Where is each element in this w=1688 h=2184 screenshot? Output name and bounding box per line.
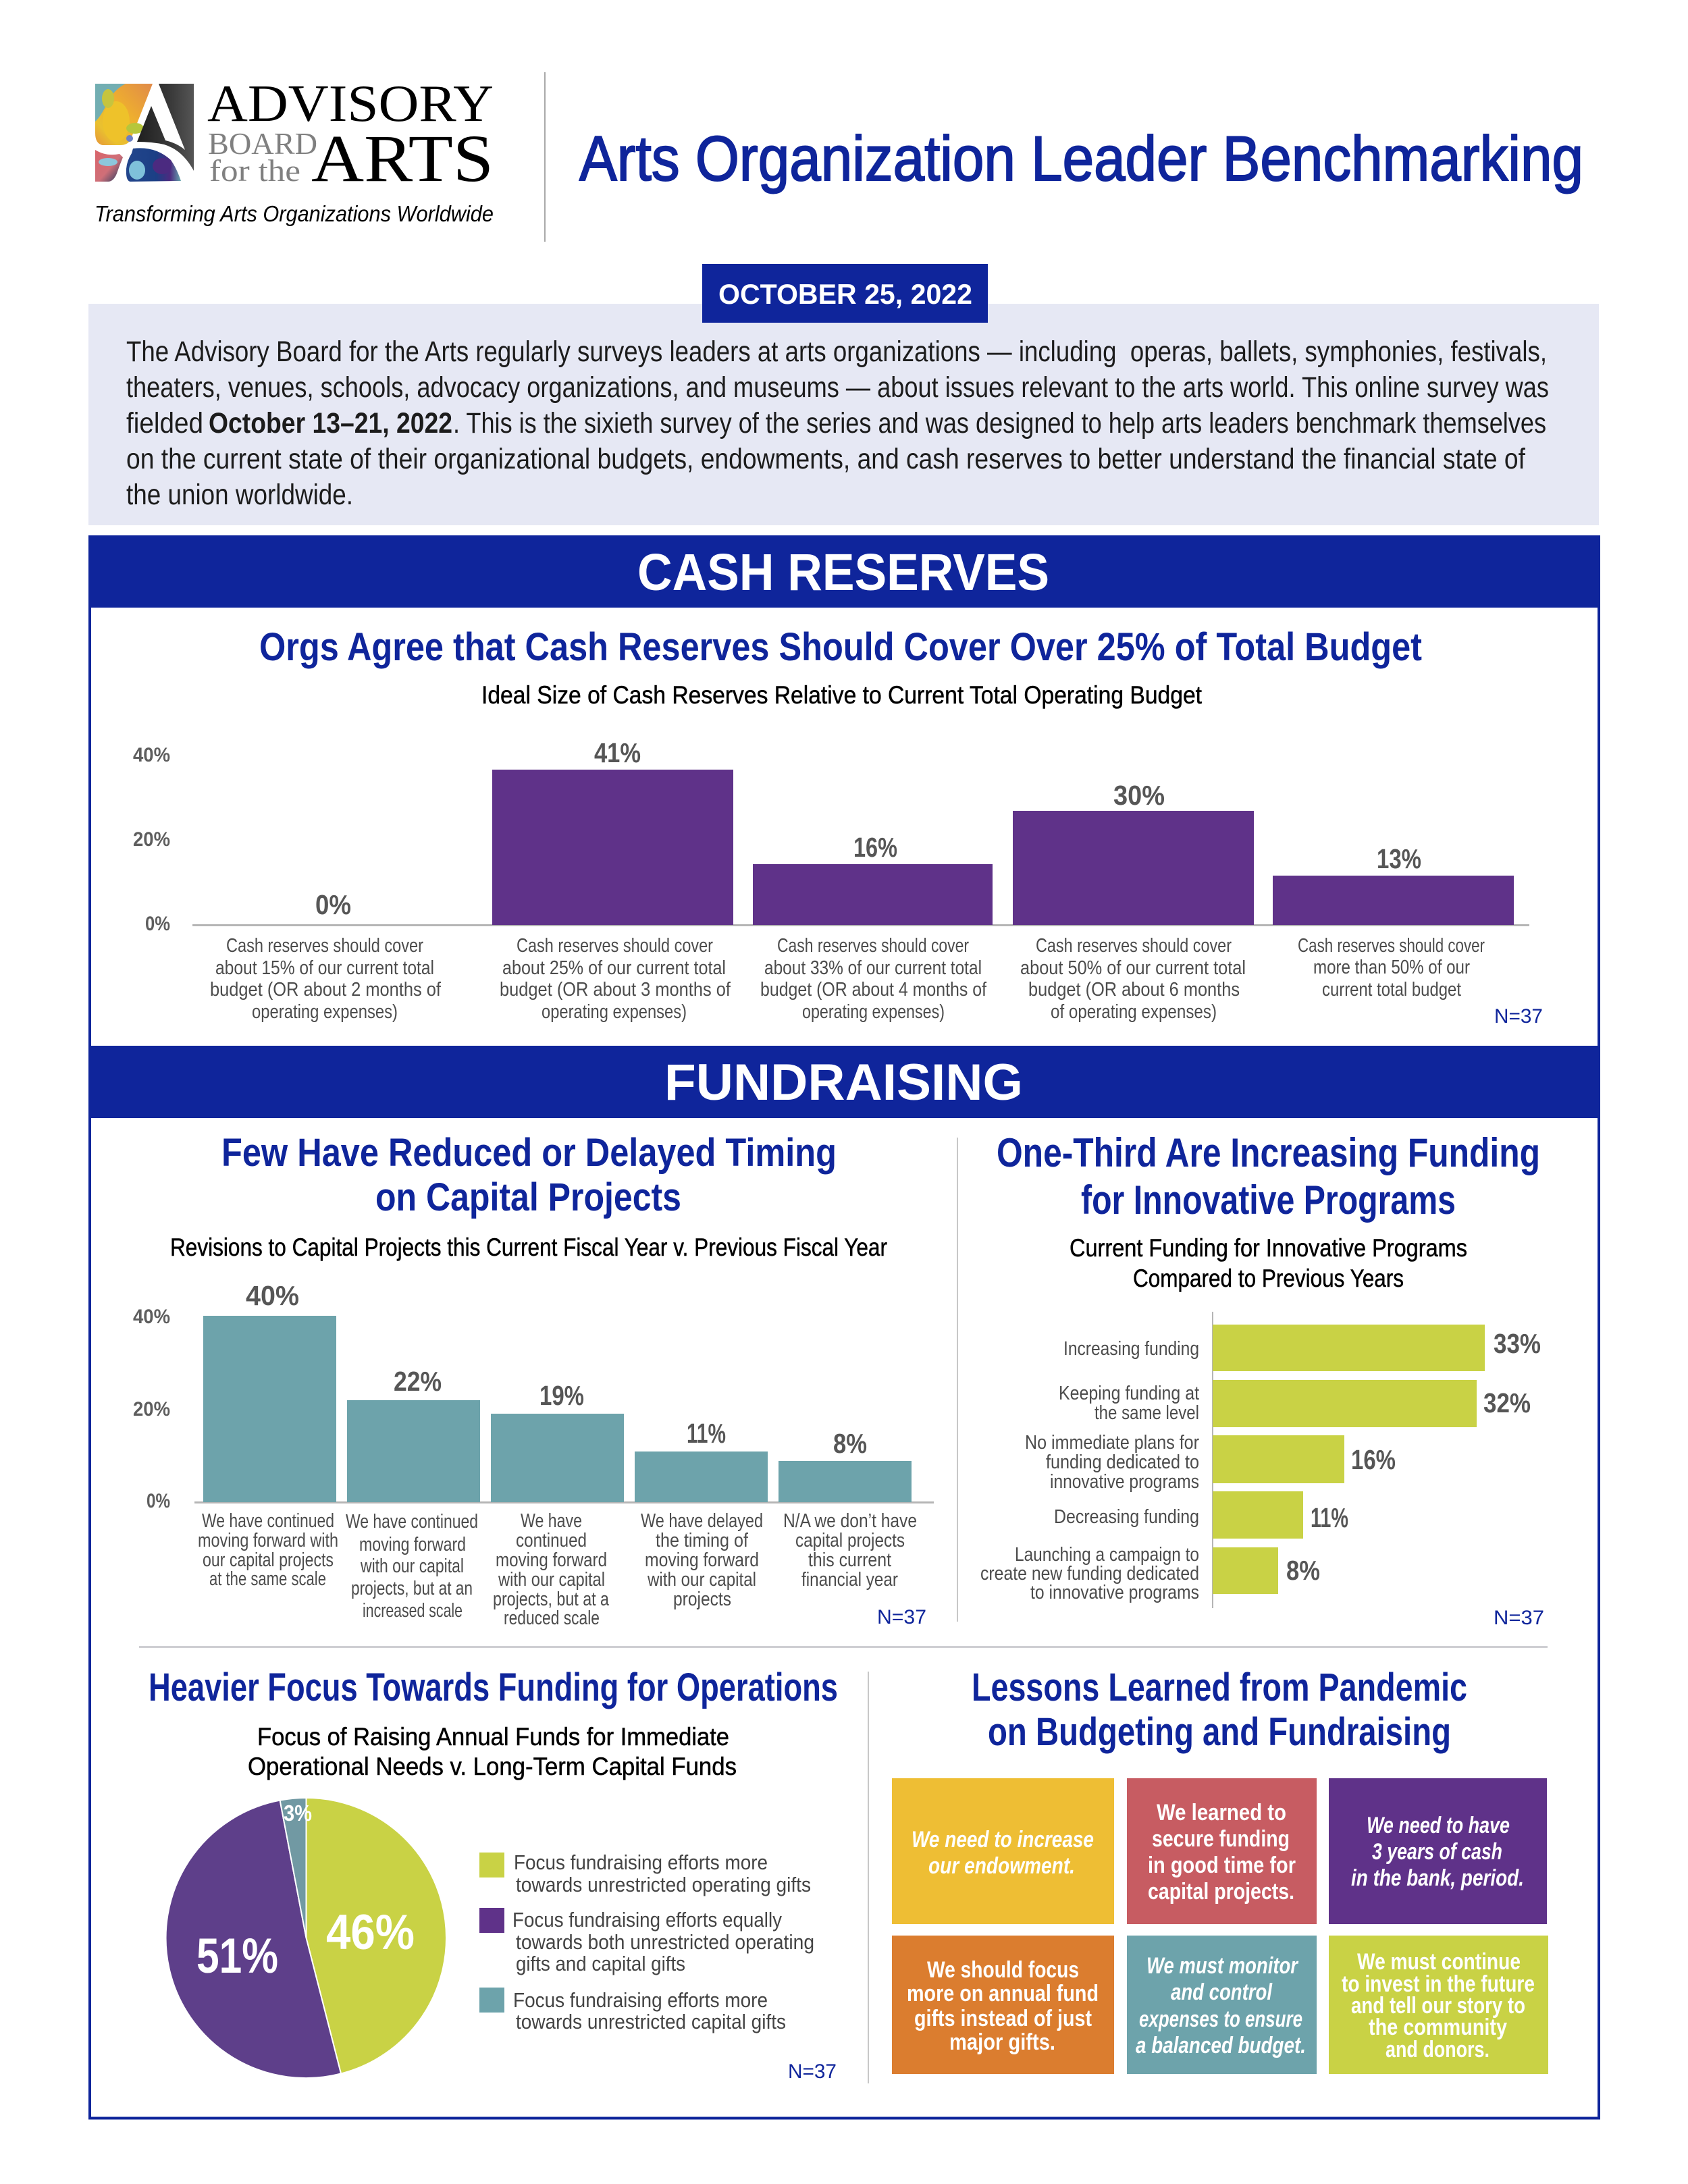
bar values bbox=[1286, 1328, 1541, 1586]
bar values: 22% bbox=[394, 1366, 442, 1397]
lesson card: annual fund gifts: more on annual fund bbox=[907, 1981, 1099, 2006]
section banner: fundraising: FUNDRAISING bbox=[664, 1054, 1023, 1111]
horizontal bar chart: funding for innovative programs bbox=[980, 1312, 1544, 1629]
heading: on Budgeting and Fundraising bbox=[988, 1710, 1451, 1754]
lesson card: endowment: our endowment. bbox=[928, 1853, 1075, 1879]
category label: 50% bbox=[1020, 935, 1246, 1023]
lesson card: invest in the future bbox=[1329, 1936, 1548, 2074]
lesson card: invest in the future: We must continue bbox=[1357, 1949, 1521, 1975]
category label: 33%: operating expenses) bbox=[802, 1001, 945, 1023]
bar values: 32% bbox=[1483, 1387, 1531, 1418]
logo wordmark: BOARD bbox=[208, 127, 317, 161]
logo wordmark: for the bbox=[209, 153, 300, 188]
section banner: cash reserves: CASH RESERVES bbox=[637, 543, 1049, 602]
bar labels: Keeping funding at bbox=[1059, 1383, 1199, 1404]
category label: 15%: operating expenses) bbox=[252, 1001, 398, 1023]
category label: 33%: about 33% of our current total bbox=[764, 957, 982, 979]
bar values: 13% bbox=[1377, 843, 1421, 874]
sample size note: N=37 bbox=[877, 1606, 926, 1628]
lesson card: cash in the bank: in the bank, period. bbox=[1351, 1865, 1524, 1891]
logo wordmark bbox=[207, 74, 494, 196]
category label: delayed timing: We have delayed bbox=[641, 1510, 763, 1532]
bar values: 11% bbox=[687, 1418, 726, 1449]
panel: capital projects bbox=[133, 1131, 934, 1629]
bar values: 16% bbox=[1351, 1444, 1396, 1475]
category label: increased scale: We have continued bbox=[346, 1511, 478, 1533]
category label: 25% bbox=[500, 935, 731, 1023]
lesson card: capital funding: capital projects. bbox=[1148, 1879, 1294, 1905]
bar values: 33% bbox=[1494, 1328, 1541, 1359]
chart subtitle: Current Funding for Innovative Programs bbox=[1070, 1234, 1467, 1262]
chart heading bbox=[997, 1130, 1540, 1223]
category label: more than 50%: current total budget bbox=[1322, 979, 1461, 1001]
bars bbox=[203, 1316, 912, 1502]
pie chart bbox=[166, 1798, 446, 2078]
date badge: OCTOBER 25, 2022 bbox=[718, 278, 972, 310]
legend: towards unrestricted capital gifts bbox=[516, 2010, 786, 2033]
logo tagline: Transforming Arts Organizations Worldwide bbox=[95, 201, 494, 226]
legend: towards both unrestricted operating bbox=[516, 1930, 814, 1954]
chart subtitle: Revisions to Capital Projects this Current Fiscal Year v. Previous Fiscal Year bbox=[170, 1233, 887, 1261]
bar values bbox=[246, 1280, 867, 1459]
lesson card: capital funding: secure funding bbox=[1152, 1826, 1290, 1852]
y axis labels: 40% bbox=[133, 1306, 170, 1328]
chart heading: for Innovative Programs bbox=[1081, 1177, 1456, 1223]
lesson card: annual fund gifts: We should focus bbox=[927, 1957, 1079, 1983]
category label: increased scale bbox=[346, 1511, 478, 1622]
category label: reduced scale: with our capital bbox=[498, 1569, 605, 1591]
bar labels: create new funding dedicated bbox=[980, 1563, 1199, 1584]
intro paragraph: fielded bbox=[126, 407, 203, 440]
bar values: 8% bbox=[833, 1428, 867, 1459]
y axis labels: 20% bbox=[133, 1398, 170, 1420]
y axis labels bbox=[133, 744, 170, 935]
y axis labels bbox=[133, 1306, 170, 1512]
category label: 25%: operating expenses) bbox=[542, 1001, 687, 1023]
lesson card: cash in the bank bbox=[1329, 1778, 1547, 1924]
bar labels: No immediate plans for bbox=[1025, 1432, 1199, 1454]
chart subtitle bbox=[248, 1723, 737, 1780]
y axis labels: 0% bbox=[145, 913, 170, 935]
panel: lessons learned bbox=[892, 1666, 1548, 2074]
legend: gifts and capital gifts bbox=[516, 1952, 685, 1975]
legend: towards unrestricted operating gifts bbox=[516, 1873, 811, 1896]
bar values bbox=[315, 737, 1421, 920]
category label: increased scale: with our capital bbox=[360, 1555, 464, 1577]
lesson card: cash in the bank: We need to have bbox=[1367, 1813, 1510, 1838]
panel: cash reserves bbox=[88, 535, 1600, 1028]
category label: not applicable: financial year bbox=[801, 1569, 898, 1591]
chart heading: Few Have Reduced or Delayed Timing bbox=[221, 1131, 837, 1175]
lesson card: control expenses: a balanced budget. bbox=[1136, 2033, 1306, 2058]
chart heading bbox=[221, 1131, 837, 1219]
category label: same scale: at the same scale bbox=[209, 1568, 326, 1590]
bar values: 0% bbox=[315, 889, 351, 920]
legend: Focus fundraising efforts more bbox=[513, 1988, 768, 2012]
category label: 25%: Cash reserves should cover bbox=[517, 935, 713, 957]
bar labels: Launching a campaign to bbox=[1015, 1544, 1199, 1566]
bar labels: Increasing funding bbox=[1063, 1338, 1199, 1360]
lesson card: control expenses bbox=[1127, 1936, 1317, 2074]
lesson card: invest in the future: and donors. bbox=[1386, 2037, 1489, 2062]
lesson card: capital funding bbox=[1127, 1778, 1317, 1924]
icon: painted A mark bbox=[95, 84, 194, 182]
category label: delayed timing: moving forward bbox=[645, 1549, 759, 1571]
category label: 15%: Cash reserves should cover bbox=[226, 935, 423, 957]
legend: Focus fundraising efforts more bbox=[514, 1850, 768, 1874]
category label: delayed timing bbox=[641, 1510, 763, 1610]
bar labels: funding dedicated to bbox=[1046, 1451, 1199, 1473]
category label: not applicable: this current bbox=[808, 1549, 891, 1571]
bars bbox=[492, 770, 1514, 925]
bar chart: revisions to capital projects bbox=[133, 1280, 934, 1629]
intro paragraph: October 13–21, 2022 bbox=[209, 407, 452, 440]
sample size note: N=37 bbox=[788, 2060, 837, 2083]
bar values: 16% bbox=[853, 832, 897, 863]
chart heading: Heavier Focus Towards Funding for Operations bbox=[149, 1666, 838, 1709]
category label: reduced scale: We have bbox=[521, 1510, 582, 1532]
category label: 25%: budget (OR about 3 months of bbox=[500, 979, 731, 1001]
date badge bbox=[702, 264, 988, 323]
chart subtitle: Compared to Previous Years bbox=[1133, 1264, 1404, 1292]
panel: intro text band bbox=[88, 304, 1599, 525]
category label: 15%: budget (OR about 2 months of bbox=[210, 979, 442, 1001]
logo wordmark: ARTS bbox=[311, 121, 494, 196]
lesson card: control expenses: and control bbox=[1171, 1979, 1273, 2005]
y axis labels: 40% bbox=[133, 744, 170, 766]
pie chart: 3% bbox=[284, 1801, 312, 1826]
bar labels: Decreasing funding bbox=[1054, 1506, 1199, 1528]
category label: 50%: of operating expenses) bbox=[1051, 1001, 1217, 1023]
panel: innovative programs bbox=[980, 1130, 1544, 1629]
chart subtitle: Ideal Size of Cash Reserves Relative to Current Total Operating Budget bbox=[481, 681, 1203, 709]
lesson card: control expenses: expenses to ensure bbox=[1139, 2006, 1302, 2032]
category label: reduced scale: continued bbox=[516, 1530, 587, 1551]
lesson card: control expenses: We must monitor bbox=[1146, 1953, 1298, 1979]
legend bbox=[479, 1850, 814, 2033]
category label: reduced scale: reduced scale bbox=[504, 1607, 600, 1629]
panel frame bbox=[90, 608, 1599, 2119]
bar values: 11% bbox=[1311, 1502, 1348, 1533]
bar chart: ideal size of cash reserves bbox=[133, 737, 1543, 1028]
bar values: 19% bbox=[539, 1380, 584, 1411]
title: Arts Organization Leader Benchmarking bbox=[579, 123, 1583, 194]
bar labels: the same level bbox=[1094, 1402, 1199, 1424]
sample size note: N=37 bbox=[1494, 1005, 1543, 1028]
category label: same scale: moving forward with bbox=[198, 1530, 338, 1551]
chart heading: on Capital Projects bbox=[375, 1175, 681, 1219]
lesson card: annual fund gifts bbox=[892, 1936, 1114, 2074]
heading: Lessons Learned from Pandemic bbox=[972, 1666, 1467, 1709]
bar values: 8% bbox=[1286, 1555, 1320, 1586]
category label: same scale bbox=[198, 1510, 338, 1590]
category label: 15% bbox=[210, 935, 442, 1023]
bar values: 40% bbox=[246, 1280, 299, 1311]
category label: delayed timing: projects bbox=[673, 1589, 731, 1610]
y axis labels: 20% bbox=[133, 828, 170, 851]
lesson card: endowment: We need to increase bbox=[912, 1827, 1094, 1853]
category label: more than 50%: more than 50% of our bbox=[1313, 957, 1470, 978]
bar values: 30% bbox=[1113, 780, 1165, 811]
category label: delayed timing: the timing of bbox=[656, 1530, 749, 1551]
category label: not applicable: capital projects bbox=[795, 1530, 905, 1551]
category label: 33% bbox=[760, 935, 987, 1023]
bar values: 41% bbox=[594, 737, 641, 768]
sample size note: N=37 bbox=[1494, 1607, 1544, 1629]
lesson card: cash in the bank: 3 years of cash bbox=[1372, 1839, 1502, 1865]
category label: more than 50% bbox=[1298, 935, 1485, 1001]
lesson card: annual fund gifts: major gifts. bbox=[949, 2029, 1055, 2055]
category label: not applicable: N/A we don’t have bbox=[783, 1510, 917, 1532]
category label: 33%: Cash reserves should cover bbox=[777, 935, 969, 957]
intro paragraph: the union worldwide. bbox=[126, 479, 353, 511]
category label: 15%: about 15% of our current total bbox=[215, 957, 434, 979]
category label: reduced scale: moving forward bbox=[496, 1549, 607, 1571]
category label: same scale: our capital projects bbox=[203, 1549, 334, 1571]
pie chart: 46% bbox=[326, 1905, 415, 1960]
lesson card: endowment bbox=[892, 1778, 1114, 1924]
bar labels: innovative programs bbox=[1050, 1471, 1199, 1493]
pie chart: 51% bbox=[196, 1929, 278, 1983]
lesson card: annual fund gifts: gifts instead of just bbox=[914, 2006, 1092, 2031]
chart heading: Orgs Agree that Cash Reserves Should Cover Over 25% of Total Budget bbox=[259, 625, 1422, 669]
category label: increased scale: moving forward bbox=[359, 1534, 466, 1555]
category label: not applicable bbox=[783, 1510, 917, 1591]
panel: funding focus bbox=[149, 1666, 838, 2083]
logo: Advisory Board for the Arts bbox=[95, 74, 494, 226]
category label: 50%: Cash reserves should cover bbox=[1036, 935, 1232, 957]
lesson card: capital funding: We learned to bbox=[1157, 1800, 1286, 1826]
bars bbox=[1213, 1325, 1485, 1594]
chart subtitle bbox=[1070, 1234, 1467, 1292]
bar labels bbox=[980, 1338, 1199, 1603]
category label: 33%: budget (OR about 4 months of bbox=[760, 979, 987, 1001]
category label: same scale: We have continued bbox=[202, 1510, 334, 1532]
y axis labels: 0% bbox=[147, 1490, 170, 1512]
section banner: cash reserves bbox=[88, 535, 1600, 608]
lesson card: invest in the future: to invest in the future bbox=[1342, 1971, 1535, 1997]
category label: delayed timing: with our capital bbox=[647, 1569, 756, 1591]
category label: more than 50%: Cash reserves should cover bbox=[1298, 935, 1485, 957]
section banner: fundraising bbox=[88, 1046, 1600, 1118]
chart subtitle: Focus of Raising Annual Funds for Immediate bbox=[257, 1723, 729, 1751]
category label: 50%: budget (OR about 6 months bbox=[1028, 979, 1240, 1001]
lesson card: invest in the future: the community bbox=[1369, 2015, 1507, 2040]
category label: increased scale: increased scale bbox=[363, 1600, 463, 1622]
lesson card: capital funding: in good time for bbox=[1148, 1853, 1296, 1878]
lesson card: invest in the future: and tell our story to bbox=[1351, 1993, 1525, 2019]
category label: increased scale: projects, but at an bbox=[351, 1578, 473, 1599]
legend: Focus fundraising efforts equally bbox=[512, 1908, 782, 1932]
heading bbox=[972, 1666, 1467, 1754]
category label: 50%: about 50% of our current total bbox=[1020, 957, 1246, 979]
category label: reduced scale bbox=[493, 1510, 610, 1629]
bar labels: to innovative programs bbox=[1030, 1582, 1199, 1603]
chart heading: One-Third Are Increasing Funding bbox=[997, 1130, 1540, 1175]
category label: reduced scale: projects, but at a bbox=[493, 1589, 610, 1610]
logo wordmark: ADVISORY bbox=[207, 74, 494, 132]
chart subtitle: Operational Needs v. Long-Term Capital Funds bbox=[248, 1753, 737, 1780]
category label: 25%: about 25% of our current total bbox=[502, 957, 726, 979]
intro paragraph bbox=[126, 336, 1549, 511]
